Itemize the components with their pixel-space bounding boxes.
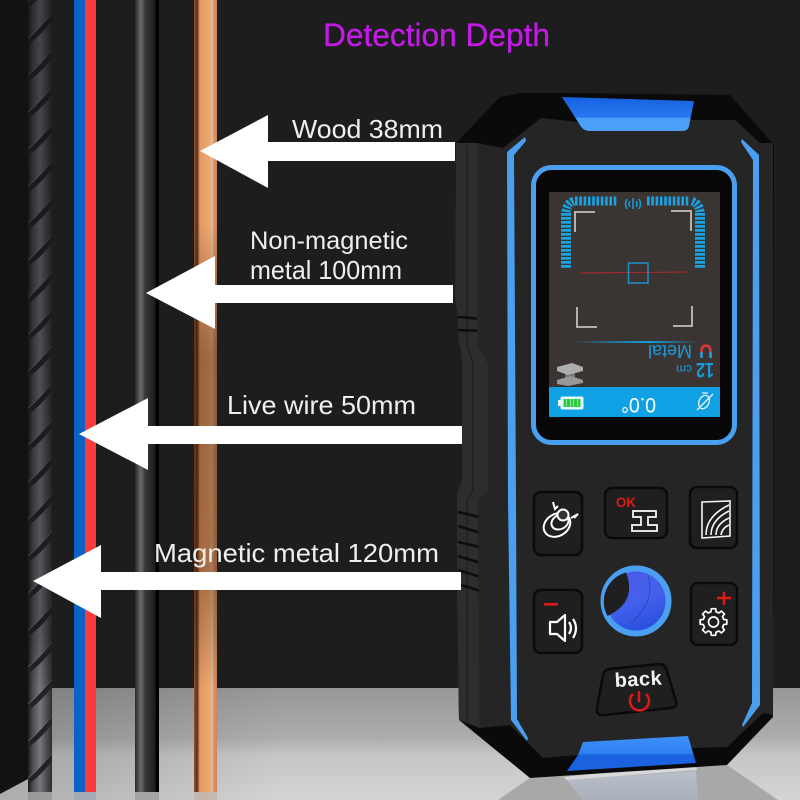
label: non-magnetic metal bbox=[250, 227, 408, 285]
title: Detection Depth bbox=[323, 17, 550, 53]
left wall corner bbox=[0, 0, 28, 794]
battery icon bbox=[558, 397, 583, 409]
sensor lens bbox=[604, 568, 668, 634]
signal bars left bbox=[561, 213, 571, 268]
device side seam bbox=[467, 145, 473, 724]
label: magnetic metal: Magnetic metal 120mm bbox=[154, 538, 439, 568]
button: live wire mode bbox=[534, 492, 582, 555]
signal bars right bbox=[695, 213, 705, 268]
button: settings plus bbox=[691, 583, 737, 645]
crosshair line bbox=[580, 272, 688, 273]
readout divider bbox=[570, 341, 700, 343]
right blue side strip bbox=[741, 139, 760, 727]
arrow: wood bbox=[200, 115, 455, 188]
left blue side strip bbox=[507, 137, 528, 741]
label: live wire: Live wire 50mm bbox=[227, 390, 416, 420]
signal bars corners bbox=[566, 201, 700, 212]
device reflection on floor bbox=[498, 763, 778, 800]
angle reading upside-down: 0.0° bbox=[621, 393, 656, 416]
magnet icon bbox=[702, 346, 710, 358]
button: metal OK bbox=[605, 488, 667, 538]
button: metal OK: OK bbox=[616, 494, 636, 510]
bottom blue cap bbox=[567, 736, 696, 771]
button: volume minus bbox=[534, 590, 582, 653]
target square bbox=[628, 263, 648, 283]
device bbox=[455, 93, 774, 778]
label: non-magnetic metal: Non-magnetic bbox=[250, 227, 408, 255]
rod reflections bbox=[28, 792, 217, 800]
device left side band bbox=[455, 143, 488, 728]
depth unit upside-down: cm bbox=[676, 362, 692, 376]
copper rod bbox=[194, 0, 217, 792]
probe icon bbox=[697, 393, 713, 410]
device body outer bbox=[455, 93, 774, 778]
screen frame bbox=[534, 168, 734, 442]
depth value upside-down: 12 bbox=[696, 358, 714, 381]
signal bars top bbox=[575, 196, 690, 206]
label: wood: Wood 38mm bbox=[292, 114, 443, 144]
mode text upside-down: Metal bbox=[648, 341, 692, 361]
device front face bbox=[477, 118, 773, 758]
button: back power bbox=[597, 664, 676, 715]
button: wood bbox=[690, 487, 737, 548]
i-beam icon bbox=[557, 363, 583, 386]
status bar bbox=[549, 387, 720, 417]
viewfinder brackets bbox=[575, 211, 692, 327]
top blue cap bbox=[562, 97, 694, 131]
rebar bbox=[28, 0, 52, 792]
button: back power: back bbox=[614, 668, 663, 692]
arrow: magnetic metal bbox=[33, 545, 461, 618]
blue and red live wire bbox=[74, 0, 96, 792]
LCD display bbox=[549, 192, 720, 417]
floor bbox=[0, 688, 800, 800]
wireless icon bbox=[626, 198, 640, 209]
arrow: non-magnetic metal bbox=[146, 256, 453, 329]
device grip ridges bbox=[458, 317, 484, 592]
label: non-magnetic metal: metal 100mm bbox=[250, 255, 402, 285]
black non-magnetic rod bbox=[135, 0, 159, 792]
arrow: live wire bbox=[79, 398, 462, 470]
